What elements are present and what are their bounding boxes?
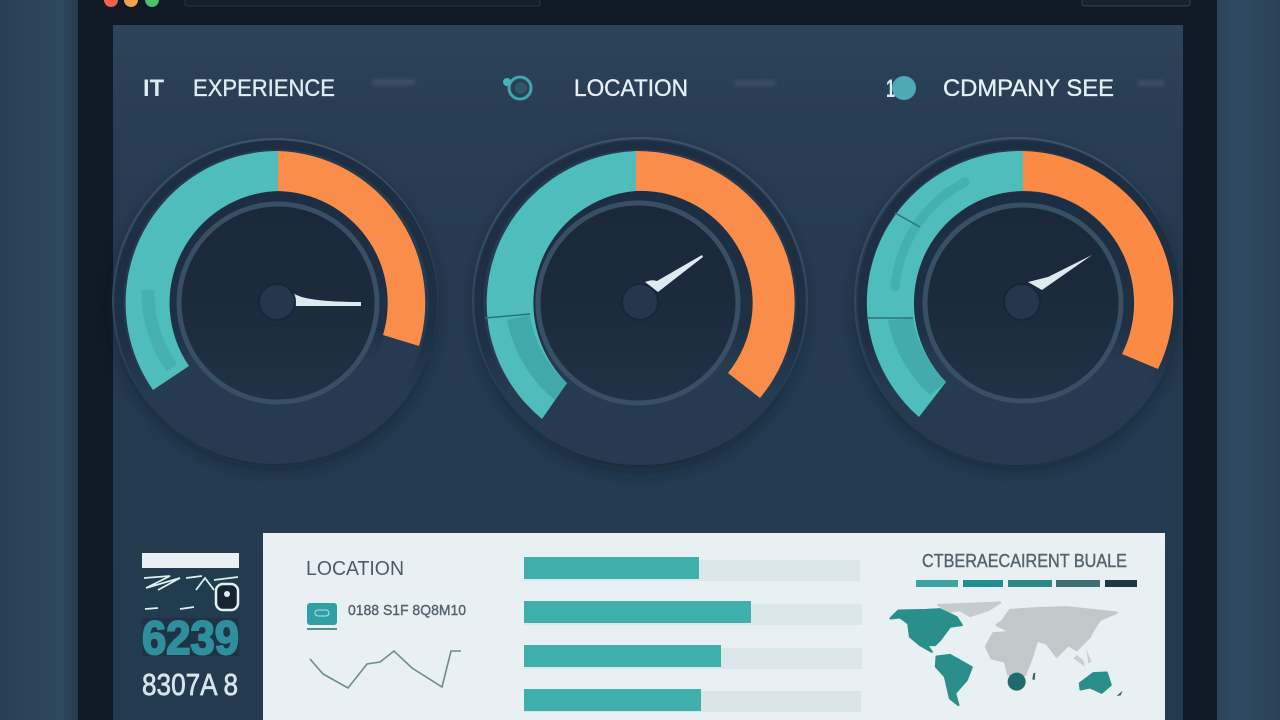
icon: teal card [307, 603, 337, 630]
needle [1028, 255, 1092, 290]
heading: location: LOCATION [574, 75, 688, 102]
location heading: LOCATION [306, 558, 404, 580]
hub [259, 284, 295, 320]
orange arc segment [1023, 151, 1173, 369]
heading: IT experience [143, 75, 415, 102]
teal arc segment [487, 151, 636, 419]
needle [645, 255, 703, 292]
needle [293, 293, 361, 306]
white header strip [142, 553, 239, 568]
heading: location [503, 75, 775, 102]
heading: company size [886, 75, 1164, 103]
orange arc segment [278, 151, 425, 346]
dial face [179, 204, 377, 402]
hub [622, 284, 658, 320]
window title bar [104, 0, 1190, 7]
gauge: company size [855, 138, 1179, 468]
bar chart [524, 557, 862, 712]
dial face [925, 205, 1121, 401]
left stat column [142, 553, 239, 702]
window control dots [104, 0, 159, 7]
thumbnail with sketch strokes [142, 574, 239, 614]
icon: location dial [503, 77, 531, 99]
hub [1004, 284, 1040, 320]
map heading: CTBERAECAIRENT BUALE [922, 551, 1127, 571]
world map [891, 603, 1123, 705]
gauge: location [473, 138, 807, 471]
teal arc segment [126, 151, 278, 390]
small white number: 8307A 8 [142, 667, 238, 702]
heading: IT experience: EXPERIENCE [193, 75, 335, 102]
heading: IT experience: IT [143, 75, 164, 102]
heading: company size: CDMPANY SEE [943, 75, 1114, 102]
location caption: 0188 S1F 8Q8M10 [348, 602, 466, 619]
gauge: IT experience [113, 139, 437, 468]
large teal number: 6239 [142, 611, 239, 664]
line chart [310, 651, 461, 688]
icon: number badge: 1 [886, 75, 895, 103]
orange arc segment [636, 151, 795, 398]
teal arc segment [867, 151, 1023, 417]
icon: number badge [886, 75, 916, 103]
dial face [538, 203, 738, 403]
light analytics panel [263, 533, 1165, 720]
map legend [916, 580, 1137, 587]
